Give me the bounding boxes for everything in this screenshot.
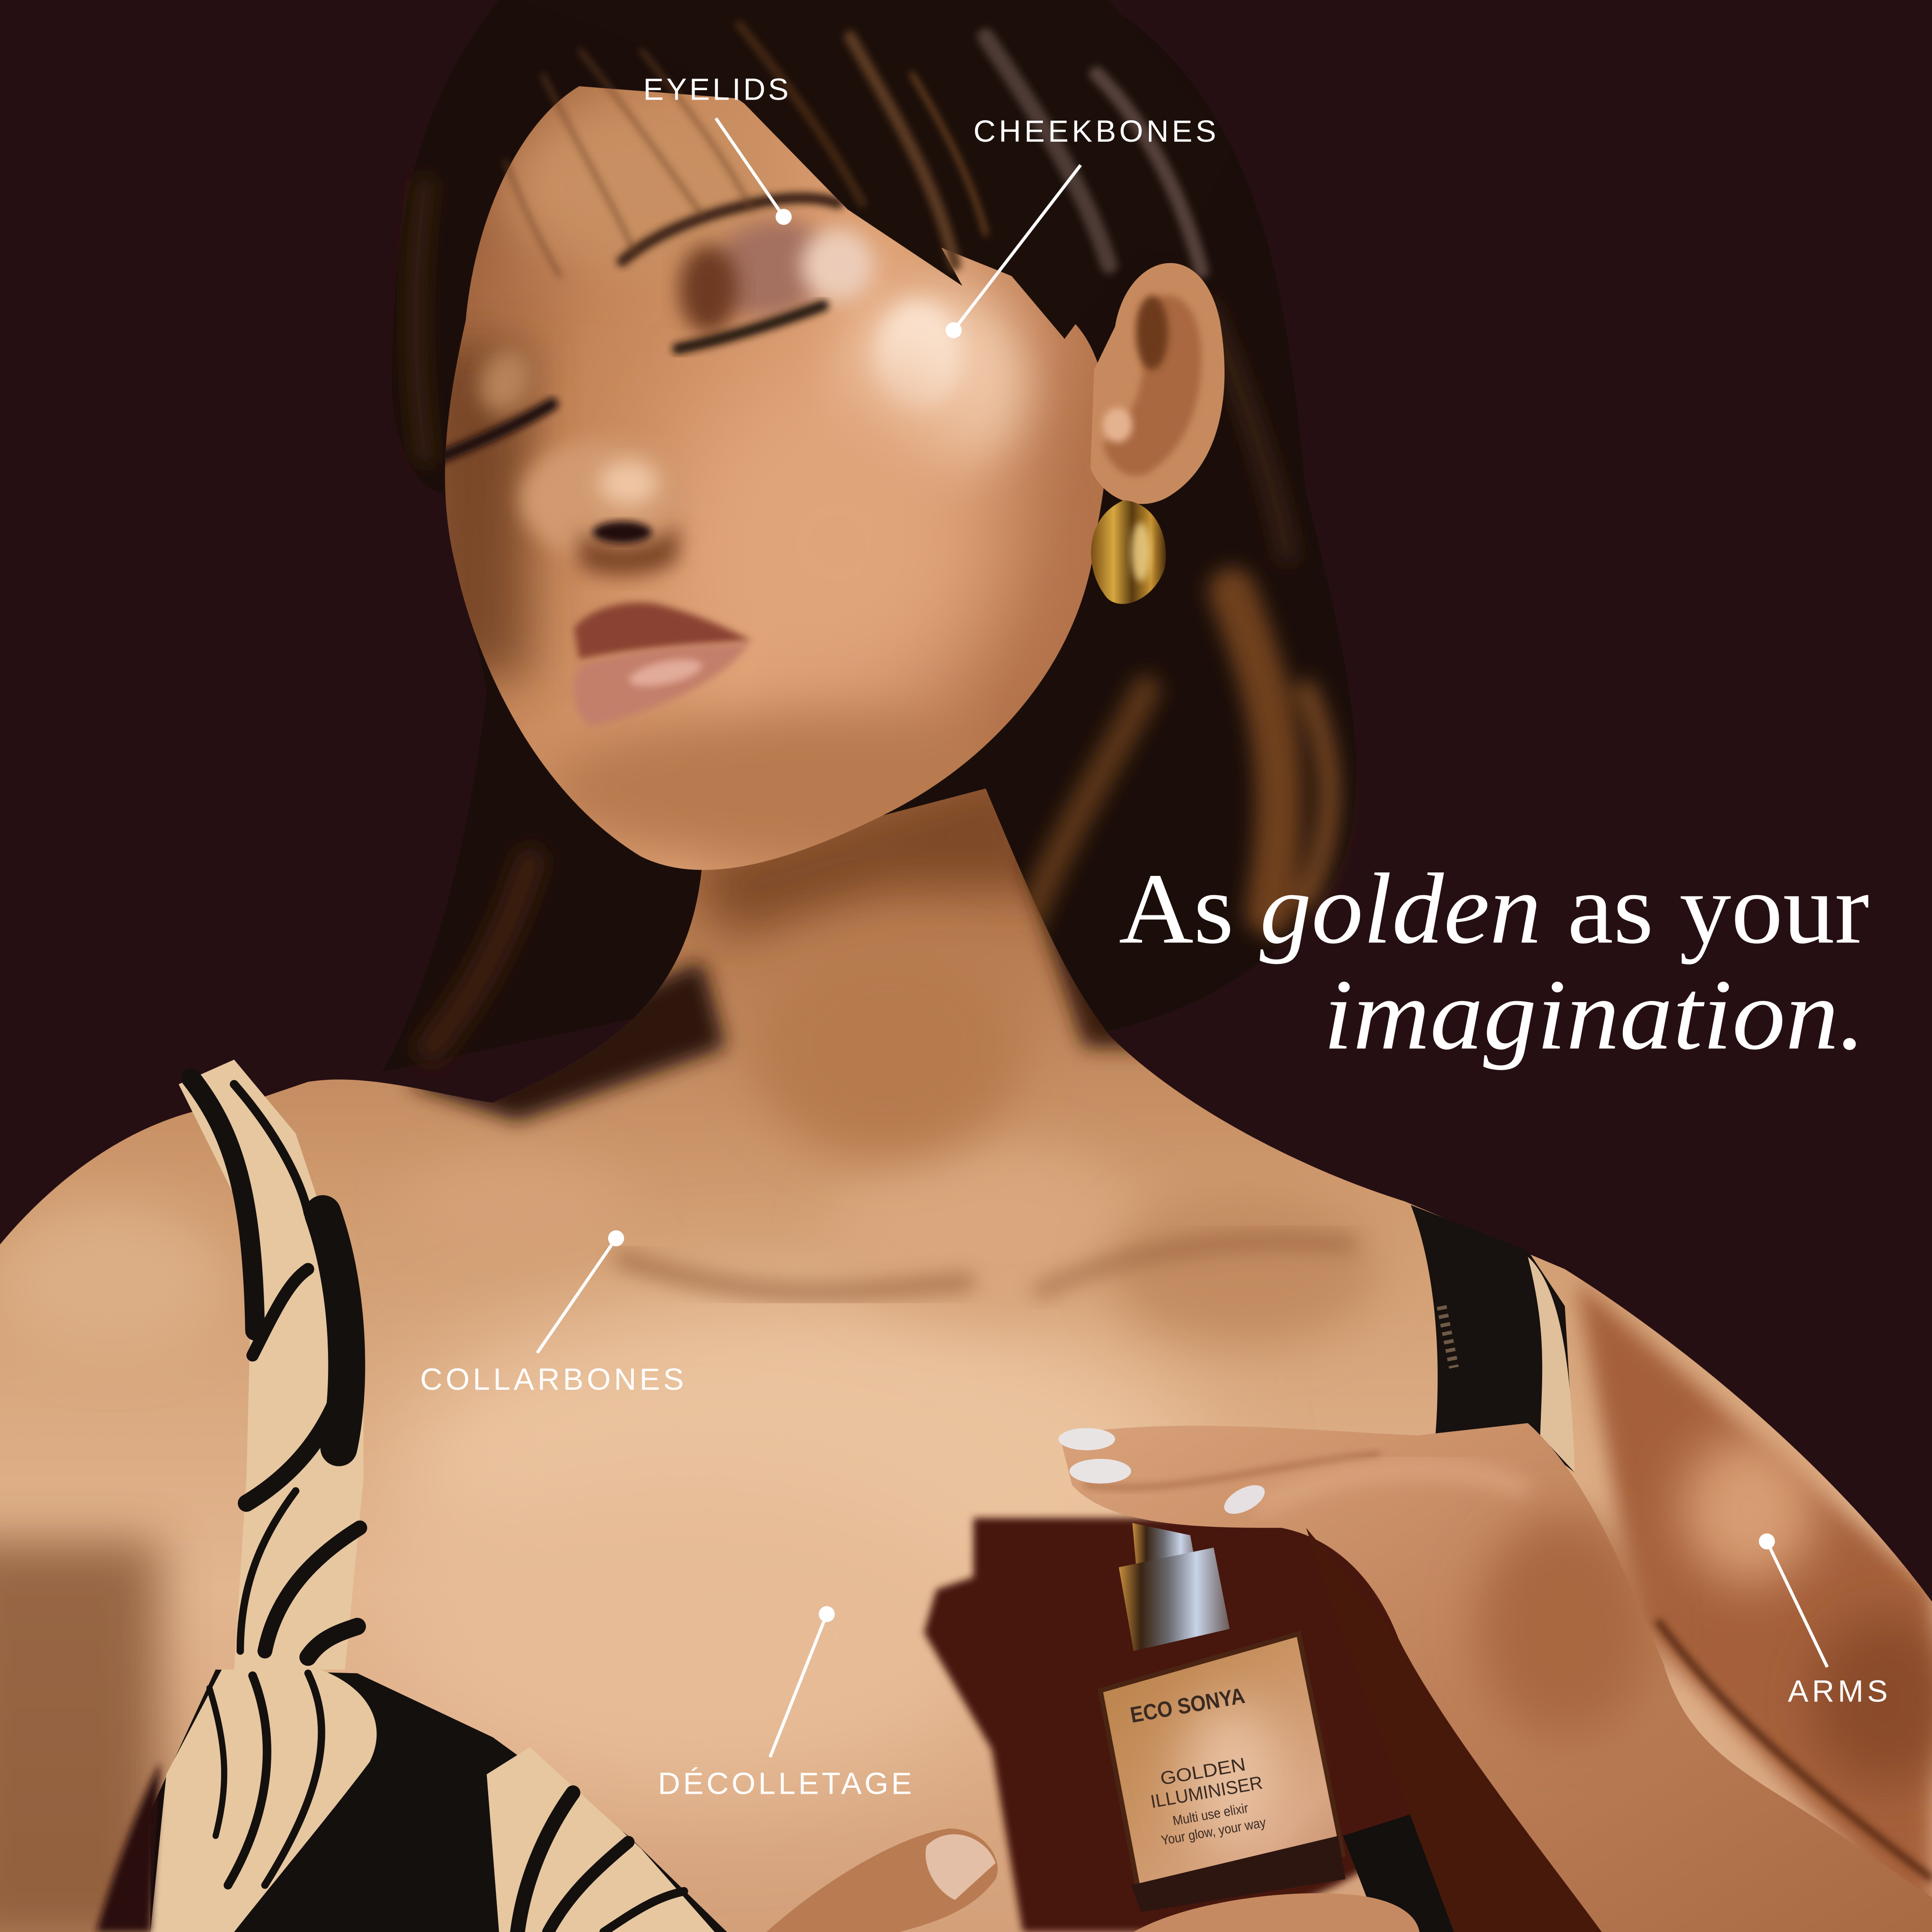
bottle label: Your glow, your way bbox=[1160, 1814, 1267, 1848]
dark gap beside left arm bbox=[96, 1762, 160, 1932]
callout: collarbones bbox=[420, 1230, 684, 1397]
headline bbox=[1119, 852, 1869, 1070]
fringe bbox=[505, 0, 1232, 339]
callout: arms bbox=[1759, 1534, 1888, 1708]
product bottle bbox=[1100, 1523, 1346, 1912]
closed eye bbox=[677, 306, 823, 349]
bottle label bbox=[1128, 1683, 1270, 1850]
callout: cheekbones bbox=[946, 114, 1216, 338]
bottle label: GOLDEN bbox=[1159, 1754, 1247, 1789]
nail: ring finger bbox=[1220, 1479, 1269, 1520]
callout: decolletage: DÉCOLLETAGE bbox=[658, 1767, 912, 1801]
nail: index finger bbox=[1069, 1459, 1131, 1483]
eyelid shimmer bbox=[699, 207, 842, 330]
callout: eyelids bbox=[643, 72, 792, 225]
forearm edge bbox=[1657, 1620, 1932, 1879]
dress bodice bbox=[150, 1670, 727, 1932]
left dress strap bbox=[179, 1060, 364, 1670]
lower fingers bbox=[1133, 1893, 1419, 1932]
nose bbox=[520, 440, 687, 558]
body and neck skin bbox=[0, 764, 1932, 1932]
nail: middle finger bbox=[1058, 1428, 1115, 1450]
bottle label: Multi use elixir bbox=[1172, 1800, 1249, 1829]
right dress strap bbox=[1411, 1205, 1575, 1473]
hair back bbox=[382, 0, 1356, 1072]
earring bbox=[1091, 500, 1166, 604]
bottle body bbox=[1100, 1634, 1343, 1904]
face bbox=[419, 86, 1108, 870]
lips bbox=[574, 602, 752, 659]
bottle label: ILLUMINISER bbox=[1149, 1772, 1264, 1812]
callout: arms: ARMS bbox=[1788, 1674, 1888, 1708]
bottle pump bbox=[1119, 1523, 1230, 1651]
callout: cheekbones: CHEEKBONES bbox=[973, 114, 1216, 149]
ear bbox=[1091, 263, 1224, 504]
dress under right hand bbox=[1343, 1786, 1510, 1932]
bottle shadow bbox=[924, 1518, 1510, 1932]
right arm shading bbox=[1577, 1282, 1932, 1932]
bottle base bbox=[1131, 1836, 1346, 1912]
far eye bbox=[437, 404, 552, 459]
eyebrow bbox=[622, 198, 838, 261]
headline: As golden as your bbox=[1119, 852, 1869, 964]
hand bbox=[1058, 1423, 1932, 1932]
callout: eyelids: EYELIDS bbox=[643, 72, 789, 106]
headline: imagination. bbox=[1323, 958, 1865, 1070]
bottle label: ECO SONYA bbox=[1128, 1683, 1247, 1727]
callout: decolletage bbox=[658, 1606, 912, 1801]
lower thumb bbox=[766, 1829, 998, 1932]
callout: collarbones: COLLARBONES bbox=[420, 1362, 684, 1397]
